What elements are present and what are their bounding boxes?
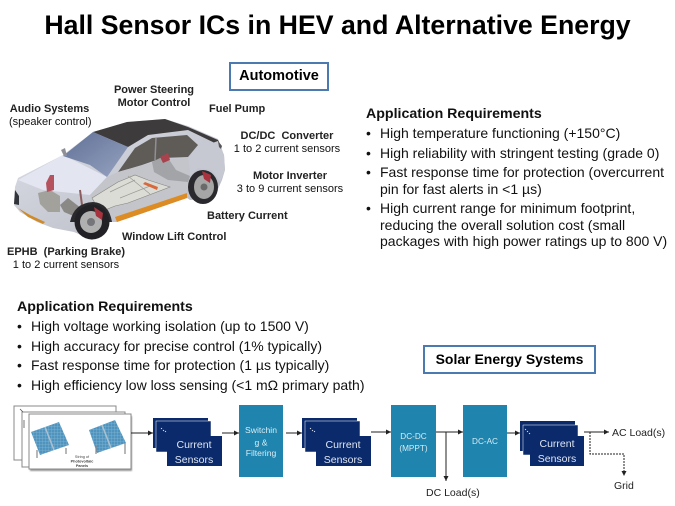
side windows — [118, 135, 198, 172]
arrows — [131, 432, 624, 481]
output labels: AC Load(s) — [612, 427, 665, 439]
brace — [80, 190, 82, 205]
car label: motor inverter — [237, 170, 343, 195]
current sensors 1: Sensors — [175, 454, 213, 466]
text block: automotive requirements: High temperature functioning (+150°C) — [380, 125, 620, 141]
title: Hall Sensor ICs in HEV and Alternative Energy — [44, 10, 631, 40]
output labels — [426, 427, 665, 499]
dc-ac block — [463, 405, 507, 477]
text block: automotive requirements: pin for fast alerts in <1 µs) — [380, 180, 542, 196]
front wheel — [70, 202, 112, 222]
mirror — [61, 148, 67, 156]
dc-ac block: DC-AC — [472, 437, 498, 446]
car label: ephb — [7, 246, 125, 271]
car label: power steering: Motor Control — [118, 97, 190, 109]
label: automotive — [229, 62, 329, 91]
text block: solar requirements: High efficiency low loss sensing (<1 mΩ primary path) — [31, 376, 365, 392]
car label: ephb: 1 to 2 current sensors — [13, 259, 119, 271]
output labels: DC Load(s) — [426, 487, 480, 499]
car label: power steering: Power Steering — [114, 84, 194, 96]
photovoltaic panel stack: Photovoltaic — [71, 460, 93, 464]
text block: automotive requirements — [366, 106, 667, 249]
text block: automotive requirements: packages with high power ratings up to 800 V) — [380, 233, 667, 249]
car label: fuel pump: Fuel Pump — [209, 103, 265, 115]
photovoltaic panel stack: String of — [75, 455, 90, 459]
dc-dc block — [391, 405, 436, 477]
car label: battery current: Battery Current — [207, 210, 288, 222]
front motor — [38, 190, 60, 212]
switching and filtering block: Switchin — [245, 425, 277, 435]
car label: motor inverter: Motor Inverter — [253, 170, 327, 182]
tail light — [218, 141, 222, 149]
text block: solar requirements: High accuracy for precise control (1% typically) — [31, 338, 322, 354]
car label: dc/dc converter: 1 to 2 current sensors — [234, 143, 340, 155]
text block: automotive requirements: Fast response time for protection (overcurrent — [380, 164, 664, 180]
current sensors 3: Current — [539, 438, 575, 450]
rear suspension and motor — [152, 155, 190, 182]
windshield — [63, 132, 128, 177]
switching and filtering block: g & — [255, 438, 268, 448]
car label: ephb: EPHB (Parking Brake) — [7, 246, 125, 258]
text block: automotive requirements: reducing the overall solution cost (small — [380, 216, 625, 232]
switching and filtering block: Filtering — [246, 448, 276, 458]
underbody frame — [90, 158, 190, 217]
front grille — [14, 190, 19, 205]
label: automotive: Automotive — [239, 68, 319, 84]
output labels: Grid — [614, 480, 634, 492]
car label: window lift control: Window Lift Control — [122, 231, 226, 243]
text block: solar requirements: Application Requirements — [17, 299, 193, 315]
dc-dc block: (MPPT) — [399, 444, 428, 453]
label: solar energy systems: Solar Energy Systems — [436, 351, 583, 367]
switching and filtering block — [239, 405, 283, 477]
front actuator — [46, 175, 54, 192]
car body — [14, 119, 225, 240]
car label: power steering — [114, 84, 194, 109]
current sensors 3 — [520, 421, 584, 466]
current sensors 2 — [302, 418, 371, 466]
current sensors 1 — [153, 418, 222, 466]
battery current bar — [115, 193, 187, 222]
current sensors 1: Current — [176, 439, 212, 451]
illustration: electric car cutaway — [14, 119, 225, 240]
battery pack — [92, 175, 170, 212]
current sensors 2: Sensors — [324, 454, 362, 466]
text block: solar requirements: High voltage working isolation (up to 1500 V) — [31, 318, 309, 334]
text block: automotive requirements: Application Requirements — [366, 106, 542, 122]
car label: audio systems — [9, 103, 92, 128]
rear quarter panel — [186, 141, 225, 182]
current sensors 2: Current — [325, 439, 361, 451]
text block: solar requirements — [17, 299, 365, 393]
label: solar energy systems — [423, 345, 596, 374]
dc-dc block: DC-DC — [400, 432, 427, 441]
car label: audio systems: (speaker control) — [9, 116, 92, 128]
car label: audio systems: Audio Systems — [10, 103, 89, 115]
text block: automotive requirements: High reliability with stringent testing (grade 0) — [380, 144, 659, 160]
roof — [93, 119, 221, 147]
solar block diagram — [14, 405, 665, 499]
car label: dc/dc converter: DC/DC Converter — [241, 130, 333, 142]
text block: automotive requirements: High current range for minimum footprint, — [380, 200, 635, 216]
car label: motor inverter: 3 to 9 current sensors — [237, 183, 343, 195]
car label: dc/dc converter — [234, 130, 340, 155]
hood — [18, 155, 107, 195]
current sensors 3: Sensors — [538, 453, 576, 465]
photovoltaic panel stack — [14, 406, 132, 471]
photovoltaic panel stack: Panels — [76, 464, 88, 468]
front bumper stripe — [18, 208, 45, 224]
text block: solar requirements: Fast response time for protection (1 µs typically) — [31, 357, 329, 373]
rear wheel — [188, 170, 218, 204]
